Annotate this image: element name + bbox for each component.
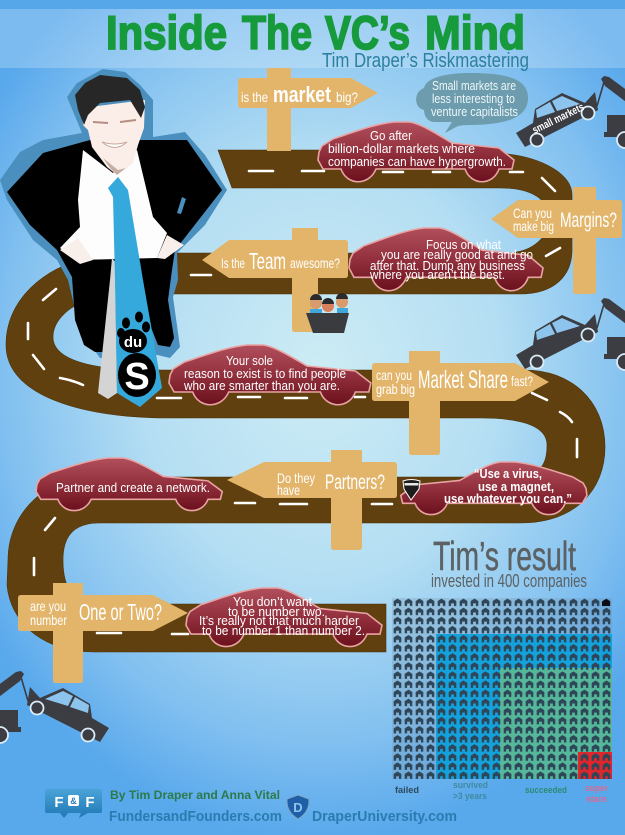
chart label: survived: >3 years bbox=[453, 791, 487, 802]
sign: is the market big? bbox=[238, 68, 378, 151]
car: focus: after that. Dump any business bbox=[370, 258, 525, 273]
chart label: super stars bbox=[585, 783, 608, 805]
car: partner: Partner and create a network. bbox=[56, 480, 210, 495]
logo: Funders and Founders bbox=[45, 789, 102, 818]
portrait blue outline bbox=[0, 69, 227, 358]
sign: is the team awesome?: awesome? bbox=[290, 255, 340, 271]
company icons bbox=[392, 598, 612, 779]
car: use a virus: use a magnet, bbox=[478, 479, 554, 494]
car: use a virus bbox=[401, 462, 587, 515]
jacket and trousers bbox=[7, 140, 222, 352]
sign: are you number one or two?: are you bbox=[30, 598, 66, 614]
car: billion-dollar markets: billion-dollar markets where bbox=[328, 141, 475, 156]
sign: is the team awesome?: Team bbox=[249, 248, 286, 274]
sign: do they have partners?: Do they bbox=[277, 470, 315, 486]
credit line: By Tim Draper and Anna Vital bbox=[110, 788, 280, 802]
sign: is the market big?: is the bbox=[241, 89, 268, 105]
sign: are you number one or two?: number bbox=[30, 612, 67, 628]
logo: Draper University shield bbox=[287, 795, 309, 819]
waffle chart: 400 companies bbox=[392, 598, 612, 779]
grey tie shadow bbox=[98, 258, 117, 399]
tow truck: middle right bbox=[516, 298, 625, 370]
url: FundersandFounders.com: FundersandFounders.com bbox=[109, 808, 282, 825]
sign: do they have partners? bbox=[227, 450, 397, 550]
url: DraperUniversity.com: DraperUniversity.com bbox=[312, 808, 457, 825]
sign: can you make big margins?: make big bbox=[513, 218, 554, 234]
speech bubble: small markets: Small markets are bbox=[432, 79, 516, 93]
car: number one: It’s really not that much harder bbox=[199, 613, 360, 628]
logo: Funders and Founders: & bbox=[70, 796, 77, 806]
super stars segment bbox=[578, 752, 612, 779]
sign: can you grab big market share fast?: can you bbox=[376, 367, 412, 383]
speech bubble: small markets bbox=[416, 73, 528, 133]
sign: is the team awesome?: Is the bbox=[221, 255, 245, 271]
subtitle: Tim Draper’s Riskmastering bbox=[322, 50, 529, 72]
car: your sole reason: reason to exist is to find people bbox=[184, 366, 346, 381]
title bbox=[106, 6, 525, 59]
survived segment bbox=[436, 634, 612, 779]
highlighted company bbox=[602, 599, 610, 606]
car: your sole reason: who are smarter than you are. bbox=[183, 378, 340, 393]
chart label: succeeded: succeeded bbox=[525, 785, 567, 796]
car: use a virus: “Use a virus, bbox=[474, 466, 542, 481]
head bbox=[82, 100, 145, 175]
car: your sole reason: Your sole bbox=[226, 353, 273, 368]
eyes and smile bbox=[93, 120, 136, 123]
logo letters: du bbox=[124, 334, 142, 351]
car: billion-dollar markets: companies can have hypergrowth. bbox=[328, 154, 506, 169]
chart label: super stars: super bbox=[585, 783, 608, 794]
car: focus bbox=[349, 228, 543, 291]
logo: Funders and Founders: F bbox=[54, 794, 64, 811]
header band bbox=[0, 0, 625, 68]
succeeded segment bbox=[500, 668, 612, 779]
hair bbox=[75, 75, 145, 125]
sign: can you grab big market share fast?: grab big bbox=[376, 381, 415, 397]
shirt bbox=[60, 150, 167, 260]
car: partner bbox=[36, 458, 222, 511]
sign: do they have partners?: have bbox=[277, 482, 300, 498]
car: focus: you are really good at and go bbox=[381, 247, 533, 262]
blue tie bbox=[108, 177, 162, 407]
sign: can you grab big market share fast? bbox=[372, 351, 549, 455]
tow truck: bottom left bbox=[0, 671, 109, 743]
title: The bbox=[242, 6, 312, 59]
sign: can you grab big market share fast?: fast? bbox=[511, 373, 533, 389]
sign: are you number one or two? bbox=[18, 583, 188, 683]
logo: Draper University shield: D bbox=[293, 800, 303, 815]
portrait: Tim Draper bbox=[0, 69, 227, 407]
speech bubble: small markets: less interesting to bbox=[432, 92, 515, 106]
winding road bbox=[6, 150, 605, 652]
car: billion-dollar markets: Go after bbox=[370, 128, 413, 143]
title: Mind bbox=[425, 6, 525, 59]
icon: team in a pod bbox=[306, 293, 349, 333]
car: focus: Focus on what bbox=[426, 237, 501, 252]
car label: small markets bbox=[531, 101, 586, 137]
car: focus: where you aren’t the best. bbox=[369, 267, 505, 282]
car: number one: to be number two. bbox=[228, 604, 325, 619]
sign: can you make big margins? bbox=[491, 187, 622, 294]
tow truck: small markets bbox=[516, 76, 625, 148]
car: use a virus: use whatever you can.” bbox=[444, 491, 572, 506]
title: Inside bbox=[106, 6, 227, 59]
paw logo bbox=[117, 312, 156, 397]
jacket pocket detail bbox=[177, 197, 186, 214]
sign: is the team awesome? bbox=[202, 228, 348, 332]
logo: Funders and Founders: F bbox=[85, 794, 95, 811]
sign: is the market big?: big? bbox=[336, 89, 358, 105]
sign: is the market big?: market bbox=[273, 82, 332, 107]
car: your sole reason bbox=[169, 345, 371, 405]
car: number one: to be number 1 than number 2. bbox=[202, 623, 365, 638]
chart label: survived: survived bbox=[453, 780, 488, 791]
title: VC’s bbox=[325, 6, 410, 59]
hands bbox=[60, 235, 184, 264]
sign: do they have partners?: Partners? bbox=[325, 471, 385, 494]
car: number one: You don’t want bbox=[233, 594, 312, 609]
car: billion-dollar markets bbox=[318, 122, 514, 182]
road lane markings bbox=[28, 171, 577, 634]
chart label: survived bbox=[453, 780, 488, 802]
neck shadow bbox=[103, 158, 126, 175]
chart label: super stars: stars bbox=[586, 794, 607, 805]
car: number one bbox=[186, 588, 382, 647]
sign: are you number one or two?: One or Two? bbox=[79, 599, 162, 625]
speech bubble: small markets: venture capitalists bbox=[431, 105, 518, 119]
chart label: failed: failed bbox=[395, 785, 419, 796]
sign: can you grab big market share fast?: Market Share bbox=[418, 366, 508, 394]
sign: can you make big margins?: Can you bbox=[513, 205, 552, 221]
logo S: S bbox=[124, 356, 150, 398]
icon: Tesla shield bbox=[403, 480, 420, 500]
